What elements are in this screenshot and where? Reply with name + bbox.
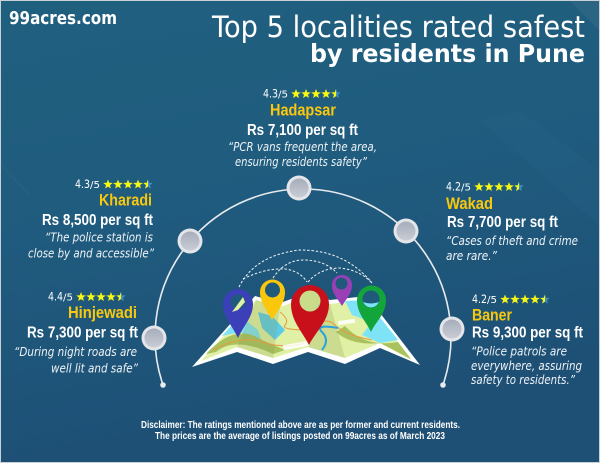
title: Top 5 localities rated safest bbox=[211, 10, 585, 44]
panel: Hadapsar: Rs 7,100 per sq ft bbox=[247, 122, 359, 139]
panel: Hadapsar bbox=[228, 86, 377, 169]
panel: Wakad: Wakad bbox=[446, 195, 493, 213]
panel: Kharadi: “The police station is bbox=[45, 230, 153, 244]
node: Kharadi bbox=[178, 228, 202, 254]
logo: 99acres.com bbox=[9, 8, 117, 29]
panel: Hinjewadi bbox=[14, 290, 139, 376]
panel: Baner: everywhere, assuring bbox=[471, 359, 582, 373]
panel: Hadapsar: Hadapsar bbox=[270, 102, 337, 120]
panel: Hadapsar: ensuring residents safety” bbox=[235, 155, 368, 169]
panel: Kharadi: 4.3 bbox=[75, 177, 90, 191]
timeline arc bbox=[155, 189, 451, 388]
panel: Hinjewadi: “During night roads are bbox=[14, 345, 137, 359]
dashed route arcs bbox=[239, 250, 372, 287]
panel: Kharadi: /5 bbox=[90, 180, 100, 191]
node: Hinjewadi bbox=[142, 326, 166, 350]
panel: Wakad bbox=[446, 180, 578, 263]
panel: Wakad: /5 bbox=[461, 182, 471, 194]
panel: Baner: 4.2 bbox=[472, 292, 487, 306]
panel: Kharadi: close by and accessible” bbox=[28, 246, 155, 260]
panel: Hinjewadi: Hinjewadi bbox=[68, 304, 137, 322]
title: by residents in Pune bbox=[310, 39, 585, 68]
icon: green pin bbox=[357, 286, 386, 332]
panel: Hinjewadi: well lit and safe” bbox=[51, 362, 139, 376]
panel: Hinjewadi: Rs 7,300 per sq ft bbox=[27, 324, 139, 342]
node: Hadapsar bbox=[286, 176, 312, 200]
panel: Wakad: are rare.” bbox=[446, 249, 498, 263]
panel: Baner: Baner bbox=[472, 306, 512, 324]
disclaimer: Disclaimer: The ratings mentioned above are as per former and current residents. bbox=[141, 419, 460, 431]
icon: purple pin bbox=[332, 275, 352, 306]
disclaimer bbox=[141, 419, 460, 442]
panel: Hadapsar: “PCR vans frequent the area, bbox=[228, 140, 377, 154]
panel: Baner: safety to residents.” bbox=[471, 373, 576, 387]
node: Wakad bbox=[394, 218, 418, 244]
disclaimer: The prices are the average of listings posted on 99acres as of March 2023 bbox=[155, 430, 445, 442]
icon: yellow pin bbox=[260, 279, 285, 320]
panel: Hinjewadi: 4.4 bbox=[48, 290, 63, 304]
panel: Baner bbox=[471, 292, 584, 387]
map illustration bbox=[192, 293, 420, 367]
panel: Hadapsar: /5 bbox=[278, 90, 288, 100]
panel: Wakad: Rs 7,700 per sq ft bbox=[447, 214, 559, 231]
panel: Hadapsar: 4.3 bbox=[263, 86, 278, 100]
panel: Kharadi: Rs 8,500 per sq ft bbox=[42, 212, 154, 229]
icon: blue pin bbox=[223, 289, 253, 338]
panel: Hinjewadi: /5 bbox=[63, 292, 73, 304]
panel: Wakad: “Cases of theft and crime bbox=[446, 234, 578, 248]
panel: Kharadi bbox=[28, 177, 155, 260]
panel: Kharadi: Kharadi bbox=[99, 192, 152, 210]
panel: Baner: /5 bbox=[487, 295, 497, 306]
node: Baner bbox=[440, 316, 464, 342]
panel: Wakad: 4.2 bbox=[446, 180, 461, 194]
panel: Baner: “Police patrols are bbox=[471, 344, 567, 358]
title bbox=[211, 10, 585, 68]
icon: red pin bbox=[291, 285, 329, 345]
